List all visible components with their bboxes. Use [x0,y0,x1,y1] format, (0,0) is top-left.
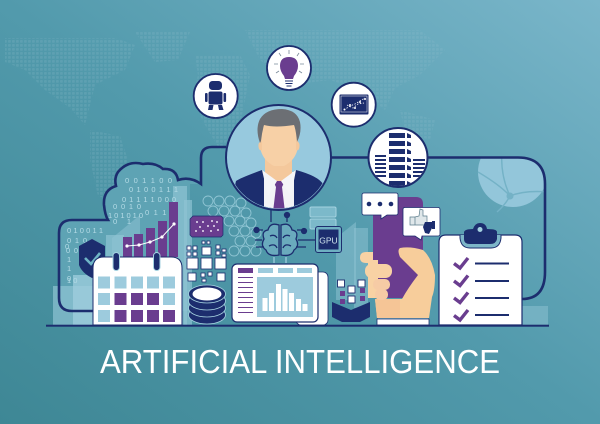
connector line: cloud outline to person [59,147,226,311]
binary digits in cloud: 0 1 0 [67,236,87,245]
title: ARTIFICIAL INTELLIGENCE [100,344,500,381]
icon: robot [194,74,238,118]
connector line: person to building and clipboard [331,158,545,299]
globe [478,158,544,212]
skyline background [53,186,548,326]
box with squares [332,280,370,322]
tablet dashboard [232,264,328,325]
purple chip [190,216,223,237]
binary digits in cloud: 1 [67,264,71,273]
data squares [187,241,226,282]
binary digits in cloud: 0 1 [113,217,131,226]
binary digits in cloud: 0 [65,242,69,251]
database [188,285,226,324]
network mesh [203,196,261,256]
person portrait [226,105,331,215]
binary digits in cloud [65,176,178,285]
icon: GPU chip [316,226,342,252]
binary digits in cloud: 0 1 1 1 1 0 0 0 [122,195,176,204]
binary digits in cloud: 1 [67,255,71,264]
bar chart with trend line [123,202,178,257]
icon: GPU chip: GPU [319,236,338,246]
binary digits in cloud: 0 0 [66,246,78,255]
server rack outline [310,207,336,229]
calendar [93,252,182,325]
speech bubble: thumbs up and down [403,208,440,240]
icon: security shield [79,239,105,278]
icon: light bulb [267,46,311,90]
icon: scatter chart [332,83,376,127]
speech bubble: typing [362,193,398,219]
baseline [46,325,549,327]
binary digits in cloud: 0 0 1 0 [113,202,141,211]
binary digits in cloud: 1 0 1 0 1 0 [108,211,143,220]
binary digits in cloud: 0 1 0 0 1 1 1 [129,185,178,194]
binary digits in cloud: 0 1 0 0 1 1 [67,226,103,235]
icon: hand holding phone [360,197,435,325]
icon: brain with circuit connections [254,210,315,263]
binary digits in cloud: 0 [67,274,71,283]
icon: buildings data [368,128,428,187]
binary digits in cloud: 0 0 1 1 0 0 [125,176,172,185]
clipboard checklist [439,223,522,325]
binary digits in cloud: 1 0 [67,276,77,285]
dotted world map [5,30,445,200]
binary digits in cloud: 0 1 1 0 [145,208,175,217]
cloud interior [59,163,201,311]
